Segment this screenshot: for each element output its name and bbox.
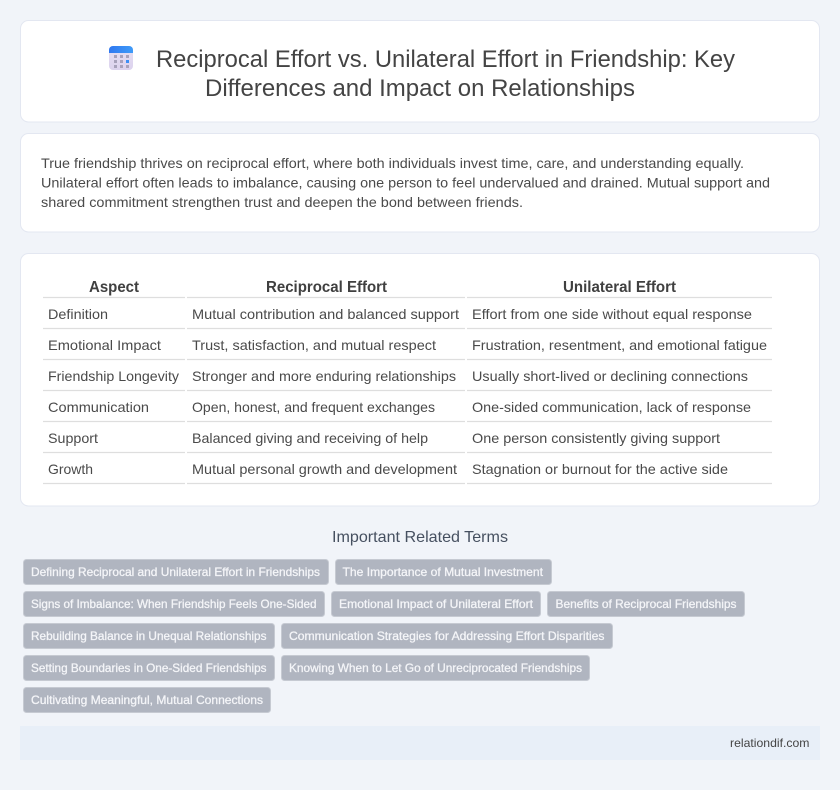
tag [332, 592, 540, 616]
table header [89, 279, 677, 296]
tag: The Importance of Mutual Investment [342, 565, 544, 579]
title: Reciprocal Effort vs. Unilateral Effort in Friendship: Key [156, 46, 735, 73]
row: communication: One-sided communication, lack of response [472, 399, 751, 415]
row: friendship longevity [48, 368, 748, 384]
row: friendship longevity: Stronger and more enduring relationships [192, 368, 456, 384]
tag [548, 592, 744, 616]
row: growth: Growth [48, 461, 93, 477]
row: growth [48, 461, 728, 477]
tag [24, 688, 270, 712]
panel: introduction [20, 134, 820, 232]
row: emotional impact: Trust, satisfaction, and mutual respect [192, 337, 436, 353]
tag: Cultivating Meaningful, Mutual Connections [31, 693, 263, 707]
row: communication: Communication [48, 399, 149, 415]
footer: relationdif.com [730, 736, 810, 750]
footer [20, 726, 820, 760]
row: emotional impact [48, 337, 767, 353]
tag: Communication Strategies for Addressing Effort Disparities [289, 629, 604, 643]
intro text: shared commitment strengthen trust and deepen the bond between friends. [41, 194, 523, 210]
tag [282, 624, 612, 648]
row: definition: Mutual contribution and balanced support [192, 306, 459, 322]
tag: Defining Reciprocal and Unilateral Effort in Friendships [31, 565, 320, 579]
row: communication: Open, honest, and frequent exchanges [192, 399, 435, 415]
tag [282, 656, 590, 680]
row: definition: Effort from one side without equal response [472, 306, 752, 322]
intro text: True friendship thrives on reciprocal effort, where both individuals invest time, care, and understanding equally. [41, 155, 744, 171]
row: growth: Stagnation or burnout for the active side [472, 461, 728, 477]
tag [24, 656, 274, 680]
table header: Reciprocal Effort [266, 279, 388, 296]
intro text [41, 155, 770, 210]
row: support: Support [48, 430, 98, 446]
title: Differences and Impact on Relationships [205, 75, 635, 102]
tag: Signs of Imbalance: When Friendship Feels One-Sided [31, 597, 316, 611]
row: definition: Definition [48, 306, 108, 322]
row: support [48, 430, 720, 446]
tag [24, 560, 328, 584]
title [156, 46, 735, 102]
panel: related term tags [24, 560, 744, 712]
row: support: Balanced giving and receiving of help [192, 430, 428, 446]
row: definition [48, 306, 752, 322]
row: friendship longevity: Usually short-lived or declining connections [472, 368, 748, 384]
table header: Unilateral Effort [563, 279, 677, 296]
tag: Knowing When to Let Go of Unreciprocated Friendships [289, 661, 582, 675]
tag: Setting Boundaries in One-Sided Friendships [31, 661, 266, 675]
row: friendship longevity: Friendship Longevity [48, 368, 179, 384]
heading: related terms: Important Related Terms [332, 529, 508, 546]
row: emotional impact: Frustration, resentment, and emotional fatigue [472, 337, 767, 353]
icon: calendar [109, 46, 133, 70]
row: support: One person consistently giving support [472, 430, 720, 446]
panel: comparison table [20, 254, 820, 506]
row: growth: Mutual personal growth and development [192, 461, 457, 477]
intro text: Unilateral effort often leads to imbalance, causing one person to feel undervalued and drained. Mutual support and [41, 174, 770, 190]
row: emotional impact: Emotional Impact [48, 337, 161, 353]
tag [24, 624, 274, 648]
panel: header [20, 20, 820, 122]
table header: Aspect [89, 279, 140, 296]
tag: Benefits of Reciprocal Friendships [556, 597, 736, 611]
tag [336, 560, 552, 584]
tag: Rebuilding Balance in Unequal Relationships [31, 629, 266, 643]
row: communication [48, 399, 751, 415]
tag: Emotional Impact of Unilateral Effort [339, 597, 534, 611]
tag [24, 592, 324, 616]
